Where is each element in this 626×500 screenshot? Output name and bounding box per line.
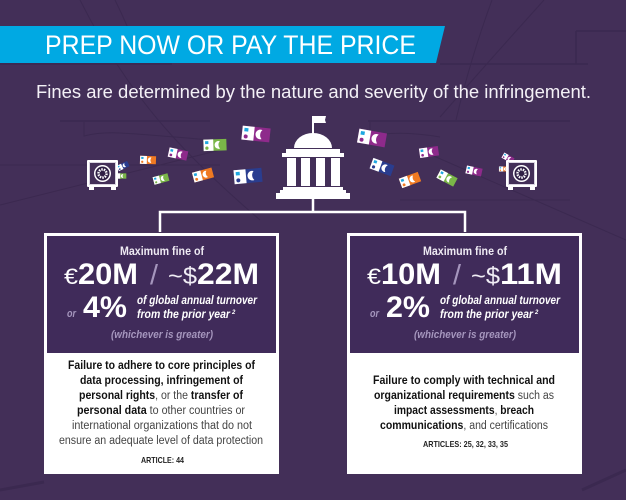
- connector bracket: [160, 199, 465, 232]
- panel header: fine amounts: ~$: [471, 263, 500, 290]
- icon: right safe with bills: [499, 153, 537, 190]
- panel body: violation description: communications, and certifications: [380, 420, 548, 432]
- panel body: violation description: Failure to comply with technical and: [373, 375, 555, 387]
- panel: higher fine tier: [46, 234, 278, 472]
- panel header: fine amounts: or: [67, 308, 77, 320]
- panel header: fine amounts: 2%: [386, 291, 430, 324]
- title banner: PREP NOW OR PAY THE PRICE: [45, 30, 416, 60]
- panel header: fine amounts: from the prior year: [440, 307, 534, 321]
- panel header: fine amounts: /: [453, 259, 461, 290]
- panel header: fine amounts: ~$: [168, 263, 197, 290]
- icon: left safe with bills: [87, 160, 130, 190]
- panel header: fine amounts: /: [150, 259, 158, 290]
- icons: flying euro bills left: [140, 126, 271, 185]
- panel header: fine amounts: Maximum fine of: [120, 244, 205, 258]
- panel header: fine amounts: 2: [231, 310, 236, 316]
- panel: lower fine tier: [348, 234, 580, 472]
- panel header: fine amounts: Maximum fine of: [423, 244, 508, 258]
- panel header: fine amounts: €: [367, 264, 381, 289]
- panel header: fine amounts: [350, 236, 579, 353]
- panel body: violation description: personal data to other countries or: [77, 405, 245, 417]
- panel header: fine amounts: 22M: [197, 258, 259, 291]
- panel body: violation description: data processing, infringement of: [80, 375, 243, 387]
- panel header: fine amounts: (whichever is greater): [414, 329, 516, 341]
- icons: flying euro bills right: [357, 129, 483, 188]
- panel body: violation description: ensure an adequate level of data protection: [59, 435, 263, 447]
- panel header: fine amounts: 20M: [78, 258, 138, 291]
- panel body: violation description: [373, 375, 555, 449]
- panel header: fine amounts: 2: [534, 310, 539, 316]
- panel header: fine amounts: of global annual turnover: [440, 293, 561, 307]
- panel header: fine amounts: 11M: [500, 258, 562, 291]
- panel header: fine amounts: of global annual turnover: [137, 293, 258, 307]
- panel body: violation description: organizational requirements such as: [374, 390, 554, 402]
- subtitle: Fines are determined by the nature and severity of the infringement.: [36, 82, 591, 102]
- panel body: violation description: international organizations that do not: [72, 420, 253, 432]
- icon: government building: [276, 116, 350, 199]
- panel body: violation description: personal rights, or the transfer of: [79, 390, 243, 402]
- panel header: fine amounts: 4%: [83, 291, 127, 324]
- panel header: fine amounts: or: [370, 308, 380, 320]
- panel header: fine amounts: 10M: [381, 258, 441, 291]
- panel header: fine amounts: from the prior year: [137, 307, 231, 321]
- panel body: violation description: ARTICLE: 44: [141, 455, 184, 465]
- panel body: violation description: ARTICLES: 25, 32, 33, 35: [423, 439, 508, 449]
- panel header: fine amounts: (whichever is greater): [111, 329, 213, 341]
- panel body: violation description: impact assessments, breach: [394, 405, 534, 417]
- panel body: violation description: [59, 360, 263, 465]
- panel body: violation description: Failure to adhere to core principles of: [68, 360, 255, 372]
- panel header: fine amounts: €: [64, 264, 78, 289]
- panel header: fine amounts: [47, 236, 276, 353]
